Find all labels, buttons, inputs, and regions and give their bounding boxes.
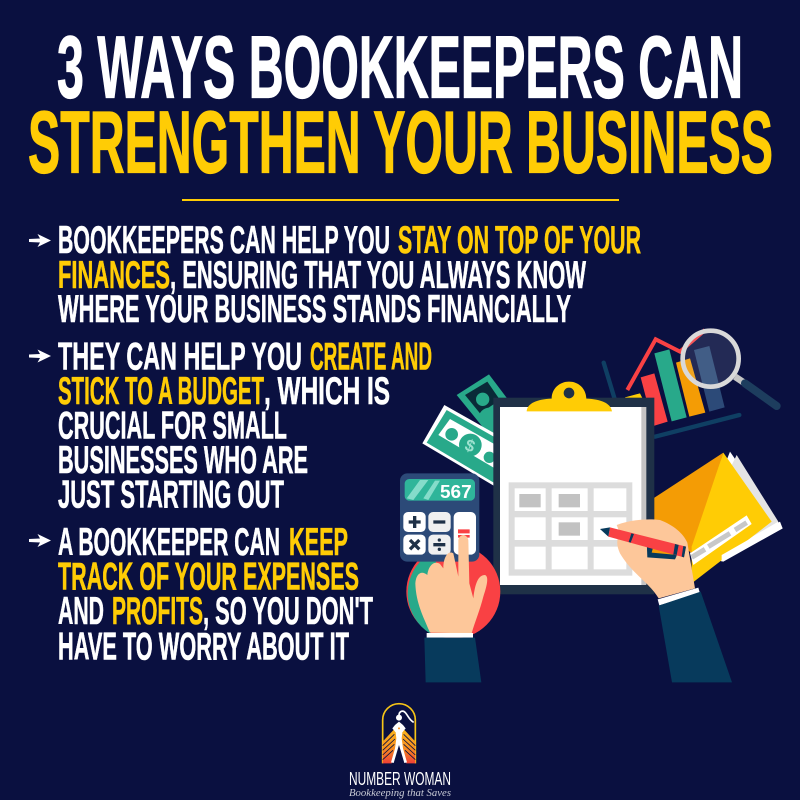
bullet 2 text block: STICK TO A BUDGET: [58, 370, 264, 413]
icon: arch with figure: [383, 704, 415, 763]
bullet 3 text block: A BOOKKEEPER CAN: [58, 521, 280, 564]
bullet 1 text block: BOOKKEEPERS CAN HELP YOU: [58, 219, 390, 262]
icon: hand and calculator: [400, 473, 500, 682]
icon: bar chart with magnifier: [604, 330, 777, 437]
bullet 3 text block: , SO YOU DON'T: [203, 590, 373, 633]
icon: yellow folder with papers: [653, 452, 783, 583]
bullet 3 text block: PROFITS: [112, 590, 203, 633]
icon: clipboard with table: [493, 382, 654, 594]
bullet 3 text block: [29, 521, 373, 668]
icon: hand and calculator: 567: [440, 481, 472, 502]
icon: dollar bills: [422, 374, 530, 493]
icon: hand with red pen: [600, 519, 732, 682]
bullet 2 text block: [29, 336, 432, 516]
bullet 1 text block: [29, 219, 641, 331]
logo: Number Woman: Bookkeeping that Saves: [349, 787, 451, 799]
bullet 2 text block: CRUCIAL FOR SMALL: [58, 404, 287, 448]
bullet 2 text block: THEY CAN HELP YOU: [58, 336, 302, 378]
logo: Number Woman: [349, 704, 451, 799]
text: CREATE AND: [310, 336, 432, 378]
icon: dollar bills: $: [462, 435, 478, 457]
bullet 2 text block: , WHICH IS: [264, 370, 390, 413]
illustration: bookkeeping desk: [400, 330, 783, 682]
bullet 2 text block: BUSINESSES WHO ARE: [58, 439, 308, 482]
logo: Number Woman: NUMBER WOMAN: [349, 768, 451, 789]
bullet 3 text block: HAVE TO WORRY ABOUT IT: [58, 626, 349, 668]
bullet 3 text block: KEEP: [289, 521, 348, 564]
title: [28, 18, 773, 192]
bullet 1 text block: FINANCES: [58, 254, 170, 297]
bullet 3 text block: AND: [58, 590, 104, 633]
bullet 3 text block: TRACK OF YOUR EXPENSES: [58, 556, 359, 598]
bullet 2 text block: JUST STARTING OUT: [58, 474, 284, 516]
